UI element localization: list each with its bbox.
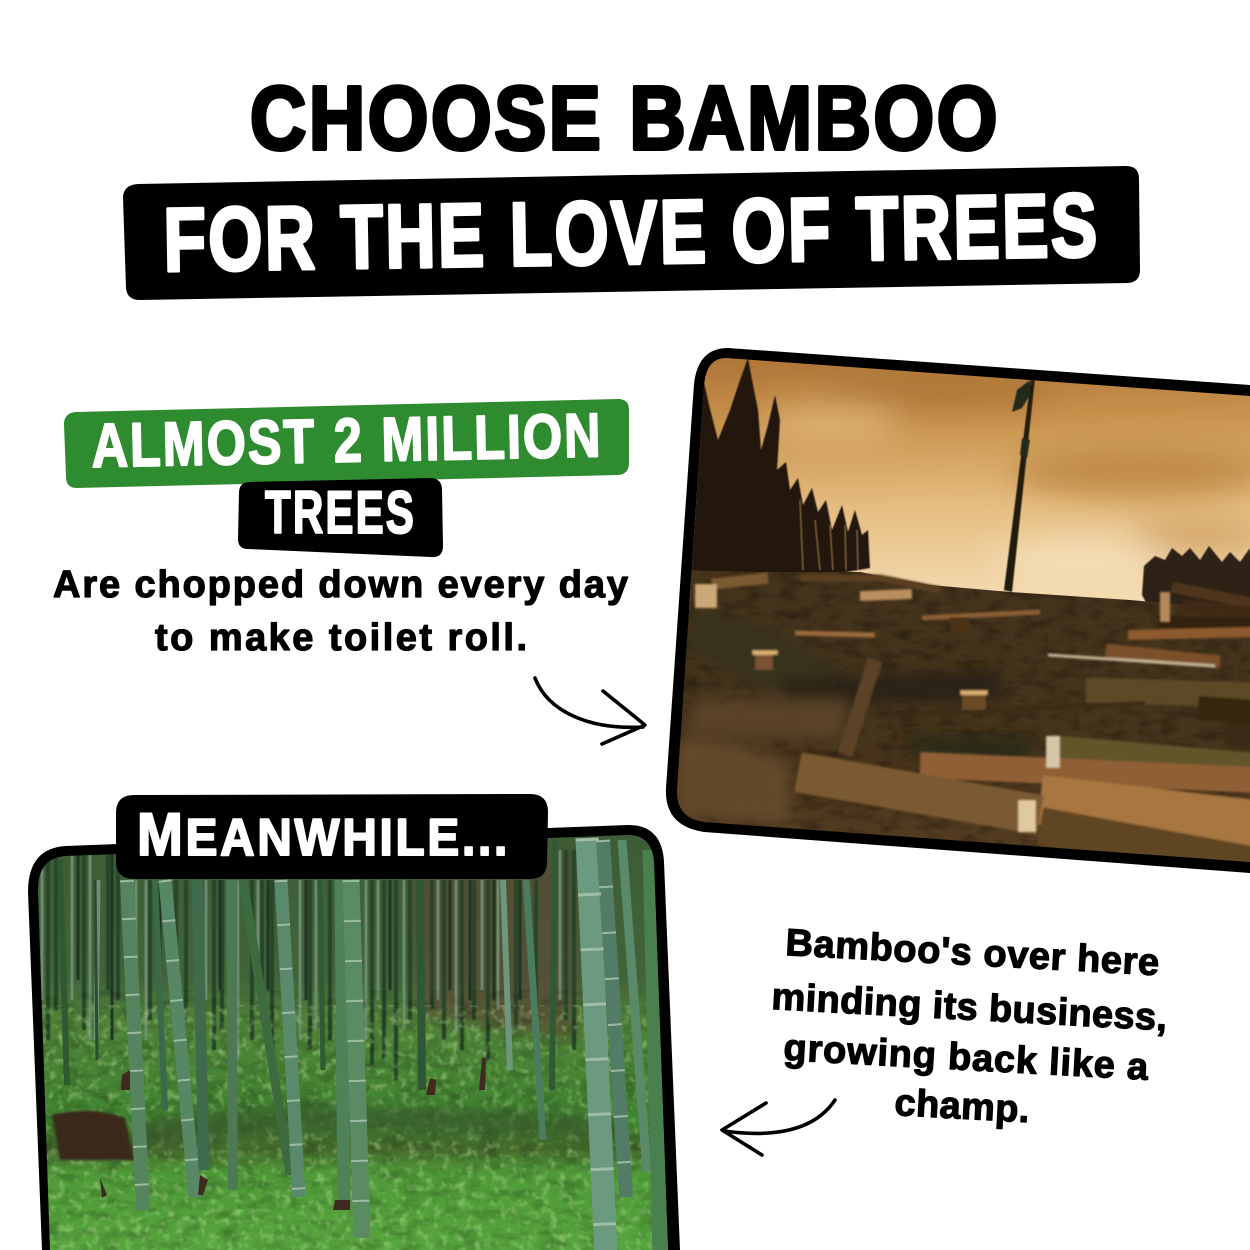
grass xyxy=(30,990,680,1250)
culm nodes xyxy=(127,838,626,1250)
right treeline xyxy=(1141,546,1250,606)
cut log ends and stumps xyxy=(695,584,1170,832)
photo: logged forest xyxy=(660,348,1250,880)
black highlight: trees xyxy=(238,478,443,557)
arrow: pointing to logged forest xyxy=(535,678,645,744)
forest floor xyxy=(30,825,680,1250)
ground xyxy=(660,570,1250,880)
ground texture xyxy=(681,572,1250,846)
text block: bamboo growing back: growing back like a xyxy=(783,1027,1150,1089)
brown slope xyxy=(410,850,580,1040)
sky xyxy=(670,350,1250,610)
earth bank xyxy=(52,1111,135,1160)
text block: chopped down every day xyxy=(53,564,628,659)
background stems xyxy=(42,850,574,1080)
text block: chopped down every day: to make toilet roll. xyxy=(155,617,527,659)
text block: bamboo growing back: Bamboo's over here xyxy=(785,922,1160,984)
left treeline xyxy=(690,358,870,580)
log piles xyxy=(712,578,1250,866)
title line: Choose Bamboo: CHOOSE BAMBOO xyxy=(250,69,1000,169)
arrow: pointing to bamboo forest xyxy=(722,1100,835,1155)
green highlight: almost 2 million: ALMOST 2 MILLION xyxy=(91,401,603,481)
text block: bamboo growing back: minding its business, xyxy=(771,976,1168,1039)
text block: bamboo growing back: champ. xyxy=(894,1082,1031,1131)
clouds xyxy=(760,376,1250,576)
text block: bamboo growing back xyxy=(771,922,1168,1131)
lone standing tree xyxy=(1004,378,1035,592)
label: meanwhile: MEANWHILE... xyxy=(137,801,510,868)
black highlight: trees: TREES xyxy=(265,479,416,546)
foreground bamboo culms xyxy=(127,838,660,1250)
foreground ground patches xyxy=(676,610,1040,825)
text block: chopped down every day: Are chopped down every day xyxy=(53,564,628,606)
bamboo shoots xyxy=(100,1058,486,1210)
mid bamboo stems xyxy=(60,840,555,1175)
photo: bamboo forest xyxy=(28,825,680,1250)
